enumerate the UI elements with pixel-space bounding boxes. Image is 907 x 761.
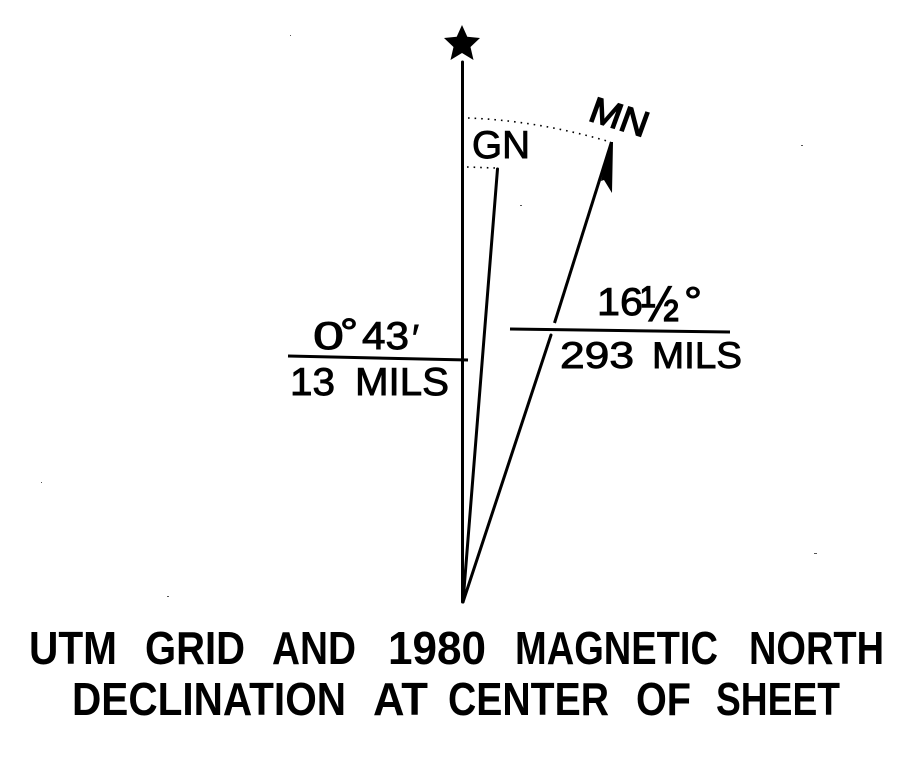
- caption: GRID: [145, 622, 245, 674]
- caption: MAGNETIC: [515, 622, 718, 674]
- magnetic north arc: [468, 118, 607, 141]
- star: true north symbol: [444, 25, 480, 60]
- magnetic declination label: °: [684, 280, 702, 324]
- grid declination label: ′: [412, 318, 419, 360]
- magnetic north line: [463, 142, 612, 602]
- caption: [29, 622, 884, 725]
- grid declination label: MILS: [355, 361, 449, 404]
- grid declination label: 13: [290, 361, 335, 404]
- MN label: MN: [584, 89, 655, 145]
- true north line: [461, 62, 464, 602]
- grid declination label: [288, 312, 468, 404]
- grid north line: [463, 169, 498, 602]
- magnetic declination label: [510, 276, 742, 376]
- magnetic declination label: 16: [597, 281, 643, 324]
- magnetic north half arrowhead: [601, 142, 613, 193]
- magnetic declination label: ½: [641, 276, 679, 332]
- caption: SHEET: [716, 673, 840, 725]
- caption: AT: [373, 673, 428, 725]
- caption: DECLINATION: [72, 673, 346, 725]
- grid declination label: °: [340, 312, 358, 354]
- caption: 1980: [388, 622, 486, 674]
- caption: CENTER: [448, 673, 609, 725]
- grid declination label: 0: [313, 315, 344, 358]
- grid declination label: 43: [362, 315, 409, 358]
- caption: AND: [272, 622, 356, 674]
- caption: UTM: [29, 622, 117, 674]
- magnetic declination label: MILS: [652, 335, 742, 376]
- caption: OF: [636, 673, 691, 725]
- grid north arc: [467, 167, 495, 168]
- GN label: GN: [472, 124, 530, 167]
- magnetic declination label: 293: [560, 335, 634, 376]
